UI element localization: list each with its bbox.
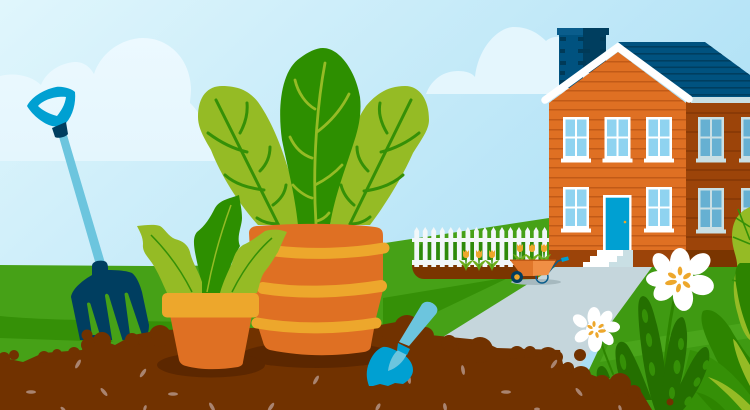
spotted leaf 4	[670, 347, 709, 410]
dark stripe blades	[696, 392, 725, 410]
front soil over leaf bases	[500, 355, 652, 410]
lawn by house	[570, 262, 750, 410]
soil ball small	[666, 398, 674, 406]
garden path	[430, 267, 652, 380]
fork collar	[52, 122, 68, 138]
soil	[0, 315, 652, 410]
fork grip	[27, 87, 75, 127]
spotted leaves	[597, 296, 711, 410]
roof trim	[545, 47, 689, 100]
small left leaf	[137, 225, 202, 293]
small pot	[162, 293, 259, 369]
roof	[618, 42, 750, 97]
right big leaf	[330, 86, 429, 225]
windows	[561, 117, 750, 234]
house	[545, 28, 750, 267]
small flower	[570, 307, 620, 352]
pot bands	[257, 248, 384, 328]
small centre leaf	[194, 195, 242, 293]
wheelbarrow	[510, 244, 569, 285]
chimney	[557, 28, 609, 88]
cloud left	[0, 38, 216, 161]
dark leaf lower	[701, 310, 750, 400]
trowel collar	[397, 343, 410, 355]
dark ground shape	[675, 350, 750, 410]
spotted leaf 3	[660, 317, 687, 410]
left lawn	[0, 265, 300, 370]
spotted leaf 2	[638, 296, 668, 410]
big plant leaves	[198, 48, 429, 226]
flower stems	[602, 300, 674, 400]
left big leaf	[198, 86, 302, 226]
fork handle	[59, 135, 105, 265]
garden bed	[412, 265, 538, 279]
tulips in bed	[459, 250, 499, 271]
big flower	[646, 248, 716, 312]
soil flecks	[26, 359, 622, 410]
fork head	[71, 261, 149, 340]
front wall	[549, 52, 686, 267]
leaf spots	[619, 309, 711, 407]
garden fork	[27, 87, 149, 345]
side wall	[686, 97, 750, 267]
spotted leaf 1	[615, 342, 652, 400]
small right leaf	[220, 230, 287, 293]
right foliage	[675, 207, 750, 410]
centre big leaf	[280, 48, 361, 225]
door	[603, 195, 632, 250]
light leaf	[732, 207, 750, 340]
small dark leaf	[597, 366, 610, 378]
fork slots	[87, 293, 142, 345]
big pot shadow	[241, 342, 393, 368]
trowel blade	[367, 347, 413, 386]
trowel handle	[399, 302, 437, 346]
fence	[412, 227, 549, 267]
trowel	[367, 302, 437, 386]
lime blades	[708, 339, 750, 410]
cloud right	[426, 27, 610, 94]
small plant	[137, 195, 287, 293]
small pot shadow	[157, 352, 265, 378]
big pot	[249, 224, 384, 355]
soil ball	[574, 349, 586, 361]
trowel scoop	[388, 349, 407, 371]
dark leaf upper	[735, 263, 750, 335]
right lawn	[260, 218, 560, 350]
steps	[583, 250, 633, 267]
